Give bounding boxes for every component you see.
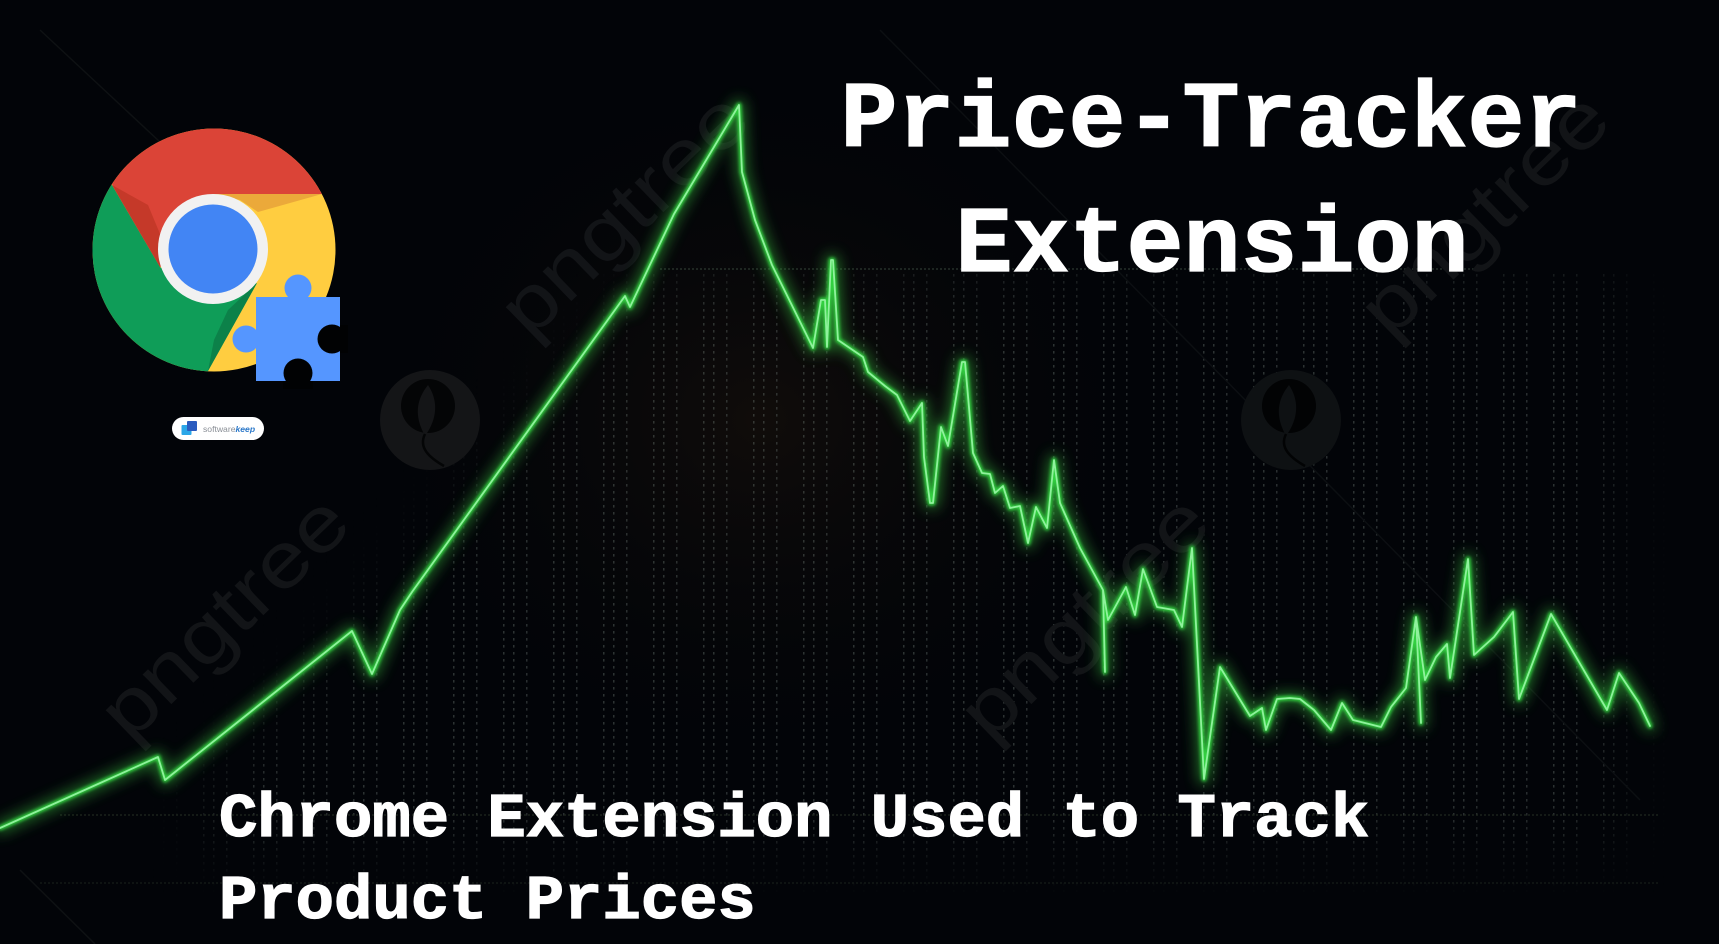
watermarks xyxy=(81,73,1626,756)
watermark text: pngtree xyxy=(941,476,1226,756)
logo hub xyxy=(158,194,268,304)
softwarekeep badge: softwarekeep xyxy=(203,424,255,434)
watermark text: pngtree xyxy=(81,476,366,756)
logo green shading xyxy=(208,283,257,371)
title: Price-Tracker xyxy=(840,68,1582,175)
line core xyxy=(0,105,1650,828)
logo yellow shading xyxy=(213,194,322,212)
watermark logo left xyxy=(380,370,480,470)
watermark text xyxy=(81,73,1626,756)
subtitle: Product Prices xyxy=(219,867,756,937)
icon: chrome logo xyxy=(92,128,336,372)
title: Extension xyxy=(955,193,1469,300)
subtitle xyxy=(219,785,1369,937)
background glow xyxy=(340,40,1180,800)
line halo xyxy=(0,105,1650,828)
watermark text: pngtree xyxy=(481,73,766,353)
price line chart xyxy=(0,105,1650,828)
title xyxy=(840,68,1582,300)
softwarekeep badge xyxy=(172,417,264,440)
watermark text: pngtree xyxy=(1341,73,1626,353)
icon: puzzle piece xyxy=(232,274,348,389)
line glow xyxy=(0,105,1650,828)
subtitle: Chrome Extension Used to Track xyxy=(219,785,1369,855)
logo red shading xyxy=(112,185,161,267)
logo red segment xyxy=(112,128,322,267)
watermark logo right xyxy=(1241,370,1341,470)
logo green segment xyxy=(92,185,257,372)
